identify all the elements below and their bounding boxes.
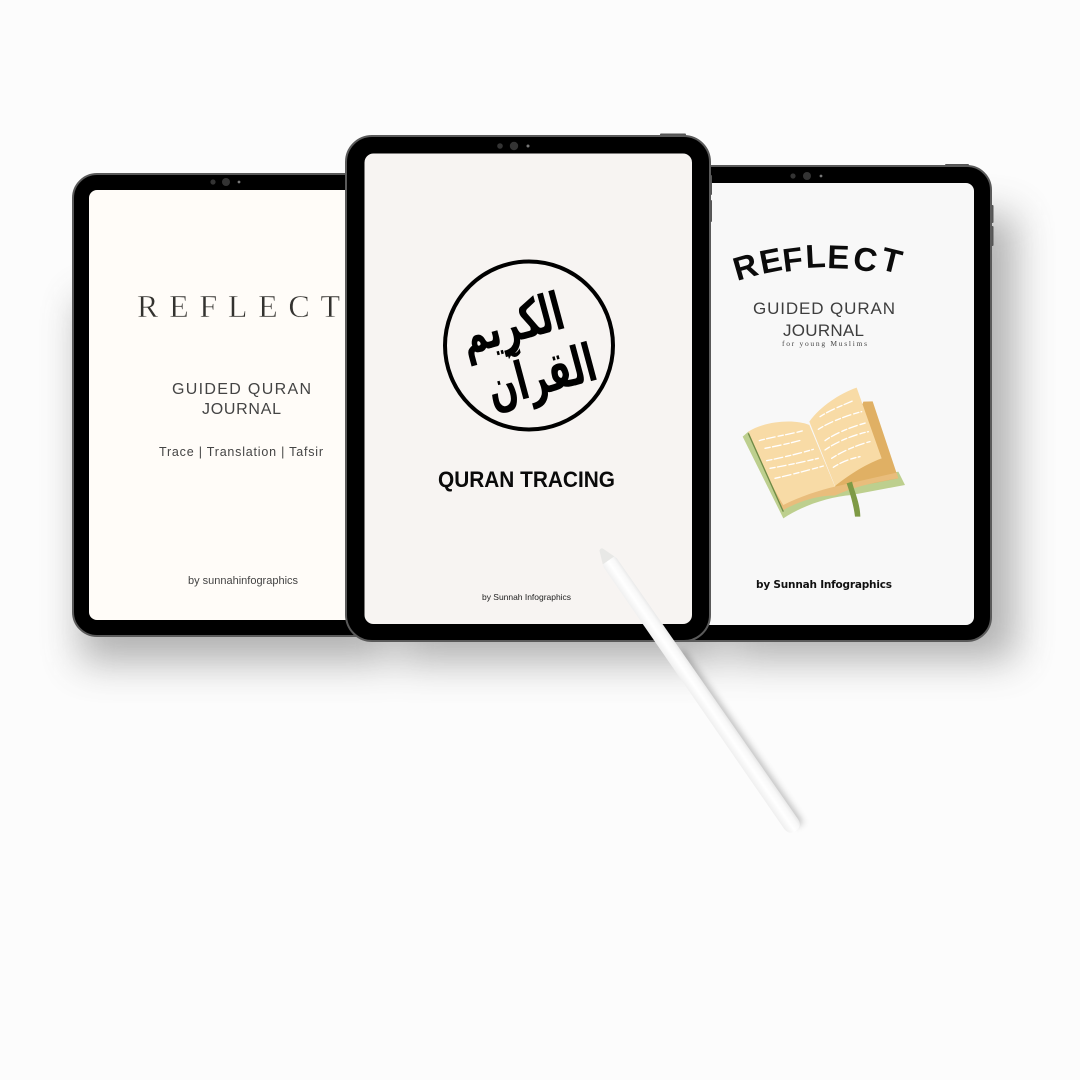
center tablet title: QURAN TRACING	[438, 467, 615, 492]
left tablet body	[73, 174, 383, 636]
left tablet	[73, 174, 383, 636]
left tablet camera	[210, 178, 240, 186]
right tablet screen	[660, 183, 974, 625]
stylus body	[601, 555, 803, 836]
left tablet screen	[89, 190, 379, 620]
right tablet camera	[790, 172, 822, 180]
center tablet body	[346, 136, 710, 641]
tablet shadows	[80, 215, 1015, 662]
left tablet author: by sunnahinfographics	[188, 575, 298, 587]
left tablet subtitle: GUIDED QURAN	[172, 381, 311, 398]
Arabic calligraphy: Al-Karim: الكريم	[454, 282, 571, 367]
roundel ring	[445, 262, 613, 430]
left tablet tagline: Trace | Translation | Tafsir	[159, 445, 323, 459]
right tablet subtitle	[753, 299, 895, 340]
center tablet	[346, 134, 712, 641]
left tablet subtitle: JOURNAL	[202, 401, 281, 418]
Arabic calligraphy text	[454, 277, 603, 423]
stylus	[594, 543, 805, 836]
right tablet author: by Sunnah Infographics	[756, 579, 892, 591]
icon: open book	[743, 388, 905, 518]
emblem: Quran calligraphy roundel	[445, 262, 613, 430]
right tablet arched title: REFLECT	[729, 237, 906, 288]
right tablet tagline: for young Muslims	[782, 339, 867, 348]
stylus shadow	[676, 649, 804, 827]
Arabic calligraphy: Al-Quran: القرآن	[479, 330, 603, 420]
left tablet title: REFLECT	[137, 288, 340, 324]
center tablet camera	[497, 142, 530, 150]
right tablet	[660, 164, 994, 641]
right tablet body	[660, 166, 991, 641]
left tablet subtitle	[172, 381, 311, 418]
right tablet buttons	[945, 164, 994, 246]
stylus tip	[595, 545, 614, 564]
center tablet screen	[364, 154, 692, 624]
center tablet buttons	[660, 134, 712, 222]
center tablet author: by Sunnah Infographics	[482, 592, 571, 602]
right tablet subtitle: JOURNAL	[783, 321, 864, 340]
right tablet subtitle: GUIDED QURAN	[753, 299, 895, 318]
